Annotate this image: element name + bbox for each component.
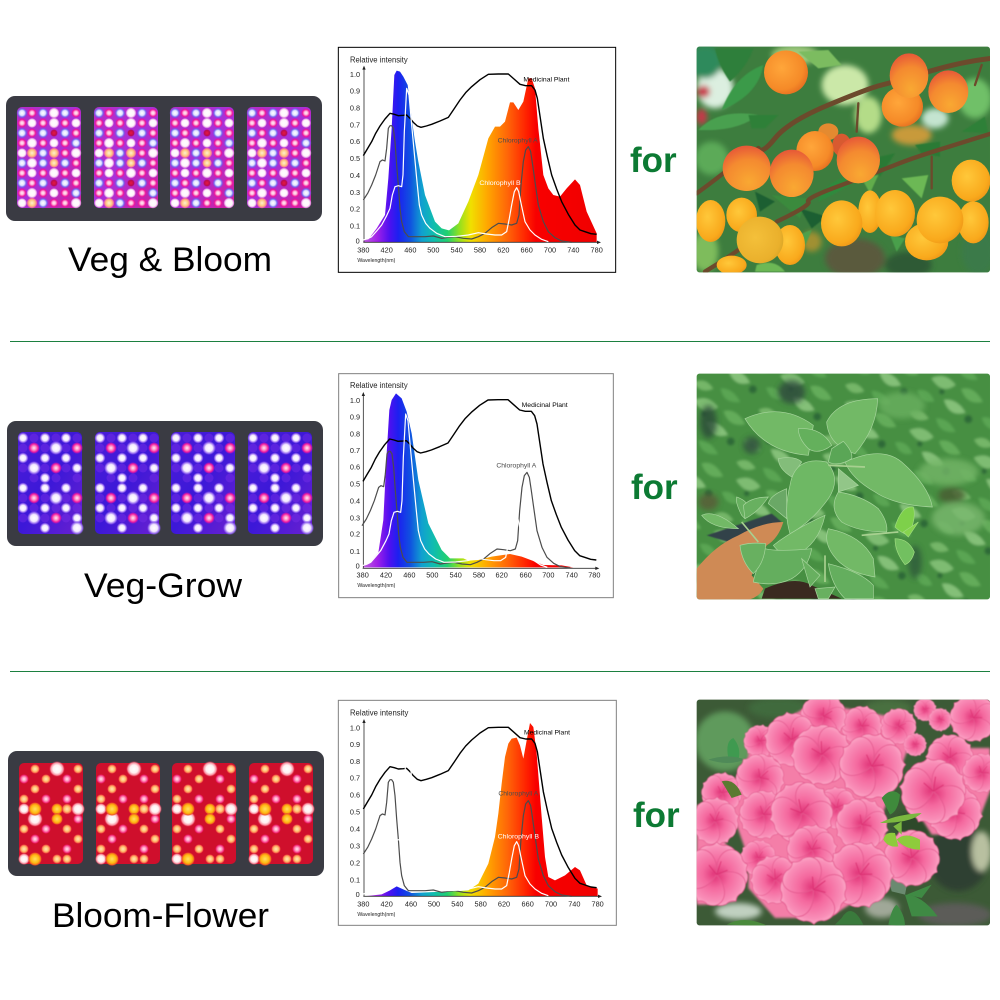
chart text: 540 [451,245,463,254]
chart text: 0.7 [350,120,360,129]
chart text: 0.8 [350,429,360,438]
chart text: 1.0 [350,396,360,405]
label: Bloom-Flower: Bloom-Flower [52,897,269,935]
spectrum fill [363,723,598,896]
chart text: 0.6 [350,790,360,799]
leaves in front of the blossoms [722,781,922,850]
chart text: 420 [381,899,393,908]
chart text: 0.9 [350,413,360,422]
heading: for: for [630,141,677,180]
leaves [698,48,988,272]
chart text: 620 [497,245,509,254]
LED light: veg and bloom [6,96,322,221]
panel: veg and bloom row [6,45,995,279]
chart text: 0.4 [350,824,360,833]
chart text: 380 [357,899,369,908]
chart text [350,708,604,918]
chart text: 700 [545,899,557,908]
chart text: Medicinal Plant [524,729,570,736]
chart text: 420 [380,570,392,579]
chart text: 0.5 [350,154,360,163]
chart text: Chlorophyll A [498,137,538,144]
heading: for: for [631,468,678,507]
chart text: 0.4 [350,496,360,505]
panel: veg grow row [7,365,1000,612]
chart text: 620 [498,899,510,908]
chart text: 0.9 [350,740,360,749]
chart text: Chlorophyll A [498,790,539,797]
chart text: 780 [588,570,600,579]
chart text: Relative intensity [350,381,408,390]
chart text: 620 [496,570,508,579]
chart text: 580 [473,570,485,579]
chart text: 0.2 [350,530,360,539]
chart text: 0.3 [350,842,360,851]
chart text: 380 [357,570,369,579]
chart text: 580 [474,245,486,254]
chart text: 660 [520,570,532,579]
chart text: 540 [450,570,462,579]
chart text: 420 [381,245,393,254]
chart text: 0.8 [350,103,360,112]
chart text: 660 [521,245,533,254]
axes [363,394,597,568]
spectrum chart: bloom flower [338,700,616,925]
herb leaves [702,399,932,599]
chart text: 0.3 [350,513,360,522]
chart text: Chlorophyll A [496,463,537,470]
chart text: Medicinal Plant [522,402,568,409]
azalea blossoms [696,700,990,926]
spectrum chart: veg grow [339,374,613,598]
chart text: 0.2 [350,205,360,214]
chart text [350,381,600,589]
chart text: 1.0 [350,723,360,732]
chart text: 0.8 [350,757,360,766]
chart text: 0.5 [350,480,360,489]
chart text: 380 [357,245,369,254]
chart text: 660 [522,899,534,908]
chart text: 460 [405,899,417,908]
chart text: 780 [592,899,604,908]
chart text: 460 [404,245,416,254]
chart text: 0.6 [350,137,360,146]
LED light: bloom flower [8,751,324,876]
chart text: 0.9 [350,87,360,96]
chart text: 700 [542,570,554,579]
chart text: 0.7 [350,446,360,455]
chart text: Wavelength(nm) [357,583,395,589]
chart text: 500 [428,899,440,908]
chart text: Chlorophyll B [479,180,521,187]
chart text: Medicinal Plant [523,76,569,83]
chart text: 700 [544,245,556,254]
chart text: 740 [567,245,579,254]
chart text: 780 [591,245,603,254]
chart text: 740 [566,570,578,579]
hand [697,522,783,600]
branches [697,58,992,272]
heading: for: for [633,796,680,835]
chart text: Relative intensity [350,55,408,64]
chart text: 0.2 [350,858,360,867]
pink mass behind the blossoms [697,708,990,918]
chart text: 0.1 [350,876,360,885]
axes [363,68,598,242]
chart text: Wavelength(nm) [357,912,395,918]
spectrum fill [363,71,597,242]
spectrum chart: veg and bloom [338,47,616,272]
chart text: 0.1 [350,547,360,556]
axes [363,721,599,896]
chart text: 0.3 [350,188,360,197]
chart text: 0 [356,890,360,899]
chart text: 540 [451,899,463,908]
chart text: 500 [427,245,439,254]
fruits [696,50,990,274]
chart text: 1.0 [350,70,360,79]
photo: orange plums on a branch [688,45,995,278]
chart text: 0.4 [350,171,360,180]
chart text: Chlorophyll B [498,834,540,841]
chart text: Relative intensity [350,708,408,717]
chart text: 460 [403,570,415,579]
label: Veg-Grow: Veg-Grow [84,567,242,605]
LED light: veg grow [7,421,323,546]
label: Veg & Bloom: Veg & Bloom [68,241,272,279]
photo: mint-like herb held in hand [696,374,990,600]
spectrum fill [363,393,573,567]
divider: top [10,341,990,342]
panel: bloom flower row [8,700,990,928]
chart text: Wavelength(nm) [357,258,395,264]
chart text: 0.6 [350,463,360,472]
chart text: 0 [356,561,360,570]
chart text: 500 [426,570,438,579]
chart text [350,55,603,264]
chart text: 0 [356,236,360,245]
chart text: 580 [475,899,487,908]
chart text: 0.1 [350,222,360,231]
photo: pink azalea flowers [696,700,990,926]
divider: bottom [10,671,990,672]
leaves behind the blossoms [708,738,938,926]
chart text: 740 [568,899,580,908]
chart text: 0.5 [350,808,360,817]
chart text: 0.7 [350,774,360,783]
